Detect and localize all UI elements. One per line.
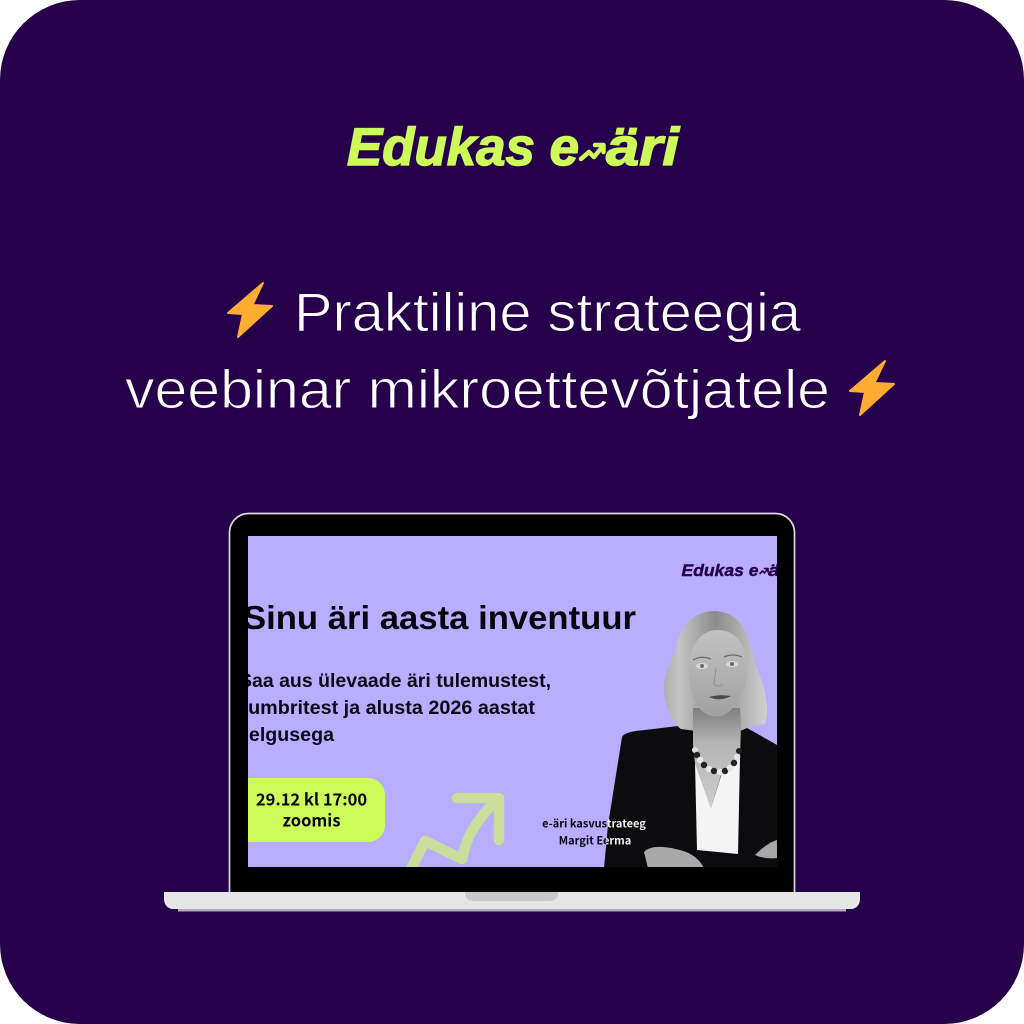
slide logo — [682, 564, 777, 576]
slide logo: ä — [768, 561, 780, 580]
laptop screen — [236, 536, 780, 875]
slide description: numbritest ja alusta 2026 aastat — [236, 698, 536, 719]
icon: lightning bolt left — [228, 283, 272, 337]
laptop — [164, 514, 860, 912]
icon: lightning bolt right — [850, 361, 894, 415]
eyes, nose and mouth — [693, 655, 742, 699]
hair — [664, 611, 767, 731]
face — [689, 630, 747, 716]
jacket — [604, 722, 777, 868]
laptop lid and bezel — [229, 514, 795, 893]
brand logo: Edukas e — [347, 118, 579, 177]
slide logo: Edukas e — [682, 561, 758, 580]
brand logo: äri — [606, 118, 680, 177]
laptop base — [178, 908, 846, 912]
slide description: Saa aus ülevaade äri tulemustest, — [239, 671, 551, 692]
portrait of Margit Eerma — [604, 611, 777, 868]
brand logo — [347, 118, 680, 177]
date badge — [240, 778, 385, 842]
necklace — [692, 747, 742, 775]
heading — [125, 281, 830, 420]
date badge: zoomis — [283, 808, 340, 832]
date badge: 29.12 kl 17:00 — [256, 786, 367, 810]
speaker caption: e-äri kasvustrateeg — [542, 816, 646, 832]
heading: veebinar mikroettevõtjatele — [125, 358, 830, 420]
slide description: selgusega — [238, 725, 334, 746]
laptop notch — [465, 892, 558, 901]
speaker caption: Margit Eerma — [559, 832, 631, 848]
neck — [693, 708, 741, 808]
shirt — [695, 757, 740, 854]
growth arrow — [408, 798, 499, 875]
heading: Praktiline strateegia — [294, 281, 801, 343]
slide title: Sinu äri aasta inventuur — [243, 599, 636, 636]
folded arms — [644, 847, 704, 868]
speaker caption — [542, 818, 646, 847]
slide description — [236, 671, 551, 746]
